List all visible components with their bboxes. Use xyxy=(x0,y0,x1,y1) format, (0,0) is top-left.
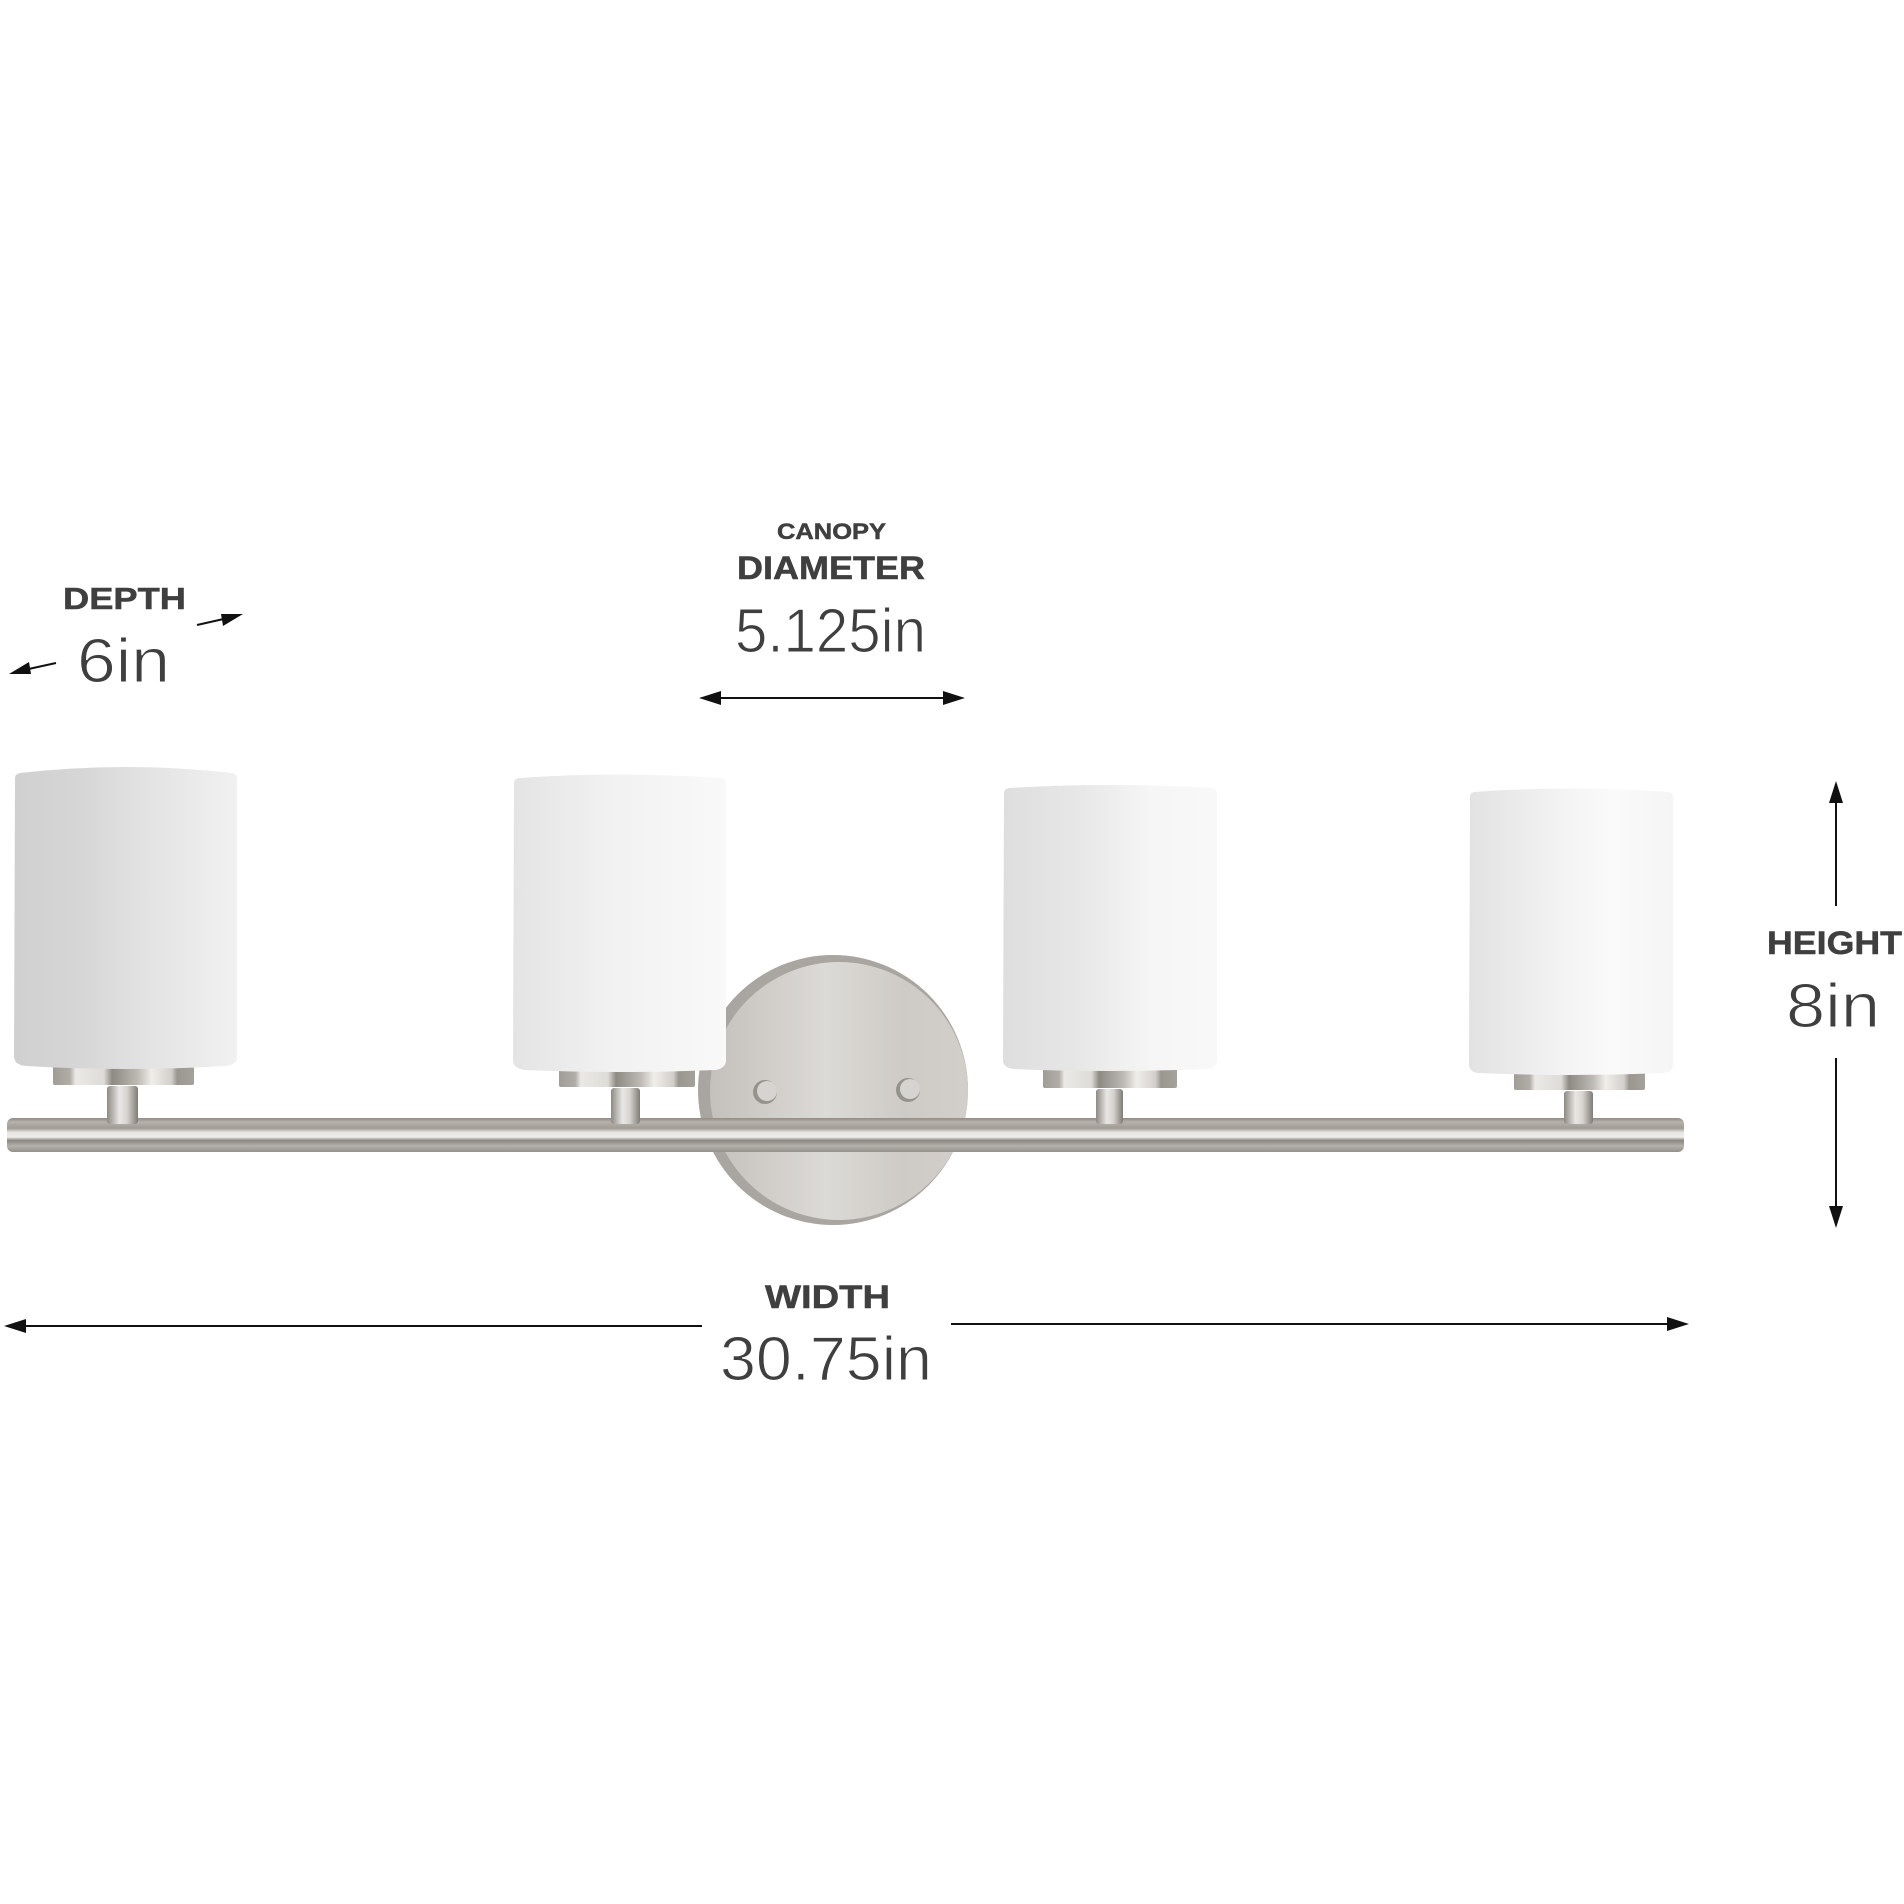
value: diameter: 5.125in xyxy=(735,597,926,666)
canopy diameter dimension xyxy=(699,519,965,705)
value: width: 30.75in xyxy=(720,1325,932,1394)
lamp 3 xyxy=(1003,785,1217,1124)
depth dimension xyxy=(9,581,243,696)
height dimension xyxy=(1767,781,1903,1228)
arrow: height down xyxy=(1829,1058,1843,1228)
width dimension xyxy=(4,1279,1689,1394)
icon: canopy bolt right xyxy=(896,1078,920,1102)
horizontal bar arm xyxy=(7,1118,1684,1152)
arrow: width right xyxy=(951,1317,1689,1331)
value: depth: 6in xyxy=(77,627,170,696)
label: canopy: CANOPY xyxy=(777,519,886,544)
lamp 2 xyxy=(513,774,726,1124)
label: diameter: DIAMETER xyxy=(737,550,925,586)
value: height: 8in xyxy=(1786,972,1880,1041)
arrow: diameter xyxy=(699,691,965,705)
arrow: height up xyxy=(1829,781,1843,906)
label: depth: DEPTH xyxy=(63,581,186,616)
label: height: HEIGHT xyxy=(1767,925,1903,961)
arrow: depth right xyxy=(197,614,243,626)
arrow: depth left xyxy=(9,662,56,674)
arrow: width left xyxy=(4,1319,702,1333)
label: width: WIDTH xyxy=(765,1279,890,1315)
icon: canopy bolt left xyxy=(753,1080,777,1104)
lamp 4 xyxy=(1469,788,1673,1124)
canopy: round wall plate xyxy=(698,955,968,1225)
lamp 1 xyxy=(14,767,237,1124)
